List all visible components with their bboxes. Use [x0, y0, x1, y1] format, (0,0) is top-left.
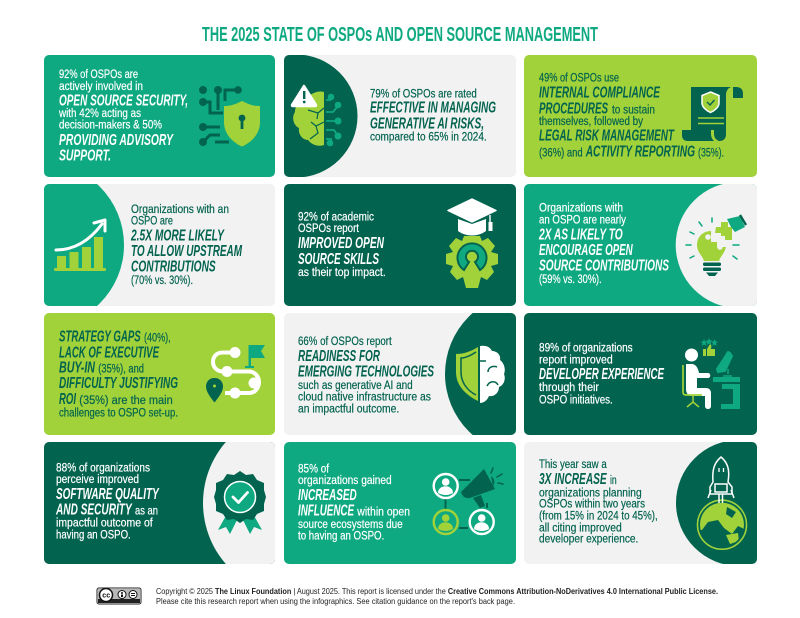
- text: upstream contributions: TO ALLOW UPSTREAM: [131, 243, 242, 260]
- text: software quality: having an OSPO.: [56, 530, 131, 542]
- text: developer experience: 89% of organizations: [539, 343, 633, 355]
- text: software quality: SOFTWARE QUALITY: [56, 486, 160, 503]
- text: 3X increase: 3X INCREASE: [539, 471, 608, 488]
- icon: circuit shield: [199, 86, 260, 146]
- text: 3X increase: all citing improved: [539, 522, 622, 534]
- text: increased influence: source ecosystems due: [298, 519, 403, 531]
- text: compliance procedures: (36%) and: [539, 148, 583, 160]
- text: OSPO set-up challenges: (40%),: [144, 333, 171, 345]
- text: 3X increase: This year saw a: [539, 459, 607, 471]
- text: encourage contributions: 2X AS LIKELY TO: [538, 226, 623, 243]
- icon: person at desk: [683, 338, 740, 409]
- text: compliance procedures: [539, 73, 724, 161]
- text: developer experience: [539, 343, 665, 406]
- text: emerging technologies: READINESS FOR: [298, 348, 380, 365]
- text: upstream contributions: [130, 204, 242, 287]
- panel: developer experience: [524, 313, 757, 435]
- text: open source security: 92% of OSPOs are: [59, 69, 138, 81]
- text: open source security: [58, 69, 188, 165]
- text: compliance procedures: themselves, followed by: [539, 116, 643, 128]
- text: encourage contributions: [538, 203, 669, 286]
- text: 3X increase: in: [610, 475, 617, 487]
- panel: emerging technologies: [284, 313, 516, 435]
- text: OSPO set-up challenges: (35%) are the main: [79, 395, 173, 407]
- text: encourage contributions: an OSPO are nearly: [539, 214, 626, 226]
- footer: copyright and citation: Copyright © 2025 The Linux Foundation | August 2025. This report is licensed under the Creative Commons Attribution-NoDerivatives 4.0 International Public License.: [156, 587, 718, 596]
- footer: copyright and citation: Please cite this research report when using the infographics. See citation guidance on the report's back page.: [156, 597, 515, 606]
- text: compliance procedures: INTERNAL COMPLIANCE: [539, 85, 661, 102]
- text: open source skills: OSPOs report: [298, 223, 360, 235]
- text: software quality: AND SECURITY: [55, 502, 133, 519]
- text: increased influence: [298, 463, 410, 543]
- text: compliance procedures: LEGAL RISK MANAGEMENT: [539, 128, 675, 145]
- icon: lightbulb with puzzle piece: [686, 215, 746, 276]
- panel: open source skills: [284, 184, 516, 306]
- text: generative AI risks: 79% of OSPOs are rated: [370, 88, 477, 100]
- text: upstream contributions: OSPO are: [131, 216, 173, 228]
- panel: OSPO set-up challenges: [44, 313, 275, 435]
- icon: Creative Commons badge: cc: [102, 592, 110, 600]
- text: software quality: [55, 462, 160, 542]
- text: OSPO set-up challenges: BUY-IN: [59, 360, 95, 377]
- text: generative AI risks: GENERATIVE AI RISKS,: [370, 116, 484, 133]
- text: open source skills: IMPROVED OPEN: [298, 235, 384, 252]
- text: developer experience: OSPO initiatives.: [539, 394, 613, 406]
- icon: award rosette: [214, 471, 266, 534]
- text: compliance procedures: 49% of OSPOs use: [539, 73, 619, 85]
- icon: rising bar chart: [54, 220, 106, 271]
- text: open source security: SUPPORT.: [59, 148, 111, 165]
- text: emerging technologies: [298, 336, 434, 415]
- text: increased influence: INCREASED: [298, 487, 357, 504]
- text: encourage contributions: Organizations with: [539, 203, 623, 215]
- text: emerging technologies: EMERGING TECHNOLOGIES: [298, 364, 434, 381]
- text: emerging technologies: an impactful outcome.: [298, 403, 399, 415]
- text: 3X increase: organizations planning: [539, 487, 642, 499]
- text: compliance procedures: to sustain: [612, 104, 655, 116]
- panel: software quality: [44, 442, 275, 564]
- text: software quality: 88% of organizations: [56, 462, 150, 474]
- text: 3X increase: OSPOs within two years: [539, 498, 645, 510]
- text: emerging technologies: 66% of OSPOs report: [298, 336, 392, 348]
- text: 3X increase: developer experience.: [539, 534, 638, 546]
- text: emerging technologies: cloud native infrastructure as: [298, 392, 431, 404]
- text: OSPO set-up challenges: challenges to OSPO set-up.: [59, 408, 178, 420]
- text: upstream contributions: CONTRIBUTIONS: [131, 259, 216, 276]
- text: open source security: with 42% acting as: [58, 108, 141, 120]
- text: open source security: actively involved in: [59, 81, 143, 93]
- text: OSPO set-up challenges: LACK OF EXECUTIVE: [59, 345, 160, 362]
- text: encourage contributions: SOURCE CONTRIBUTIONS: [539, 258, 669, 275]
- icon: Creative Commons badge: [97, 588, 141, 604]
- icon: graduation cap and gear: [446, 199, 498, 288]
- text: compliance procedures: (35%).: [698, 148, 724, 160]
- text: compliance procedures: ACTIVITY REPORTING: [585, 144, 695, 161]
- text: open source skills: 92% of academic: [298, 212, 374, 224]
- text: OSPO set-up challenges: DIFFICULTY JUSTIFYING: [59, 375, 178, 392]
- text: software quality: as an: [135, 506, 158, 518]
- text: open source skills: SOURCE SKILLS: [298, 251, 379, 268]
- text: open source skills: [298, 212, 386, 279]
- text: 3X increase: (from 15% in 2024 to 45%),: [539, 511, 658, 523]
- text: generative AI risks: EFFECTIVE IN MANAGING: [370, 100, 496, 117]
- text: increased influence: to having an OSPO.: [298, 531, 384, 543]
- text: emerging technologies: such as generative AI and: [298, 380, 413, 392]
- text: encourage contributions: ENCOURAGE OPEN: [539, 242, 633, 259]
- text: software quality: impactful outcome of: [56, 518, 153, 530]
- icon: roadmap with flag and pin: [206, 345, 265, 402]
- text: 3X increase: [539, 459, 658, 546]
- text: open source skills: as their top impact.: [298, 267, 386, 279]
- text: open source security: PROVIDING ADVISORY: [59, 132, 174, 149]
- text: software quality: perceive improved: [56, 474, 139, 486]
- panel: generative AI risks: [284, 55, 516, 177]
- panel: encourage contributions: [524, 184, 757, 306]
- footer: copyright and citation: [156, 587, 718, 606]
- text: upstream contributions: (70% vs. 30%).: [131, 275, 193, 287]
- text: upstream contributions: Organizations with an: [131, 204, 229, 216]
- icon: scroll document: [682, 87, 743, 141]
- text: compliance procedures: PROCEDURES: [539, 100, 608, 117]
- icon: rocket over globe: [698, 457, 746, 549]
- text: developer experience: DEVELOPER EXPERIENCE: [539, 366, 665, 383]
- text: OSPO set-up challenges: (35%), and: [98, 364, 144, 376]
- text: open source security: decision-makers & 50%: [59, 120, 162, 132]
- text: developer experience: through their: [539, 382, 599, 394]
- text: developer experience: report improved: [539, 354, 613, 366]
- text: OSPO set-up challenges: ROI: [59, 391, 76, 408]
- panel: compliance procedures: [524, 55, 757, 177]
- icon: shield and brain: [456, 346, 505, 403]
- text: generative AI risks: compared to 65% in 2024.: [370, 132, 487, 144]
- text: OSPO set-up challenges: STRATEGY GAPS: [59, 329, 141, 346]
- panel: open source security: [44, 55, 275, 177]
- text: generative AI risks: [370, 88, 496, 144]
- icon: people network and megaphone: [434, 468, 503, 534]
- panel: upstream contributions: [44, 184, 275, 306]
- text: encourage contributions: (59% vs. 30%).: [539, 274, 602, 286]
- text: increased influence: 85% of: [298, 463, 330, 475]
- text: OSPO set-up challenges: [59, 329, 178, 420]
- text: increased influence: organizations gained: [298, 475, 392, 487]
- panel: 3X increase: [524, 442, 757, 564]
- text: increased influence: INFLUENCE: [298, 503, 355, 520]
- text: upstream contributions: 2.5X MORE LIKELY: [130, 228, 225, 245]
- text: open source security: OPEN SOURCE SECURITY,: [59, 93, 188, 110]
- icon: brain with warning: [292, 86, 342, 146]
- text: increased influence: within open: [356, 507, 410, 519]
- panel: increased influence: [284, 442, 516, 564]
